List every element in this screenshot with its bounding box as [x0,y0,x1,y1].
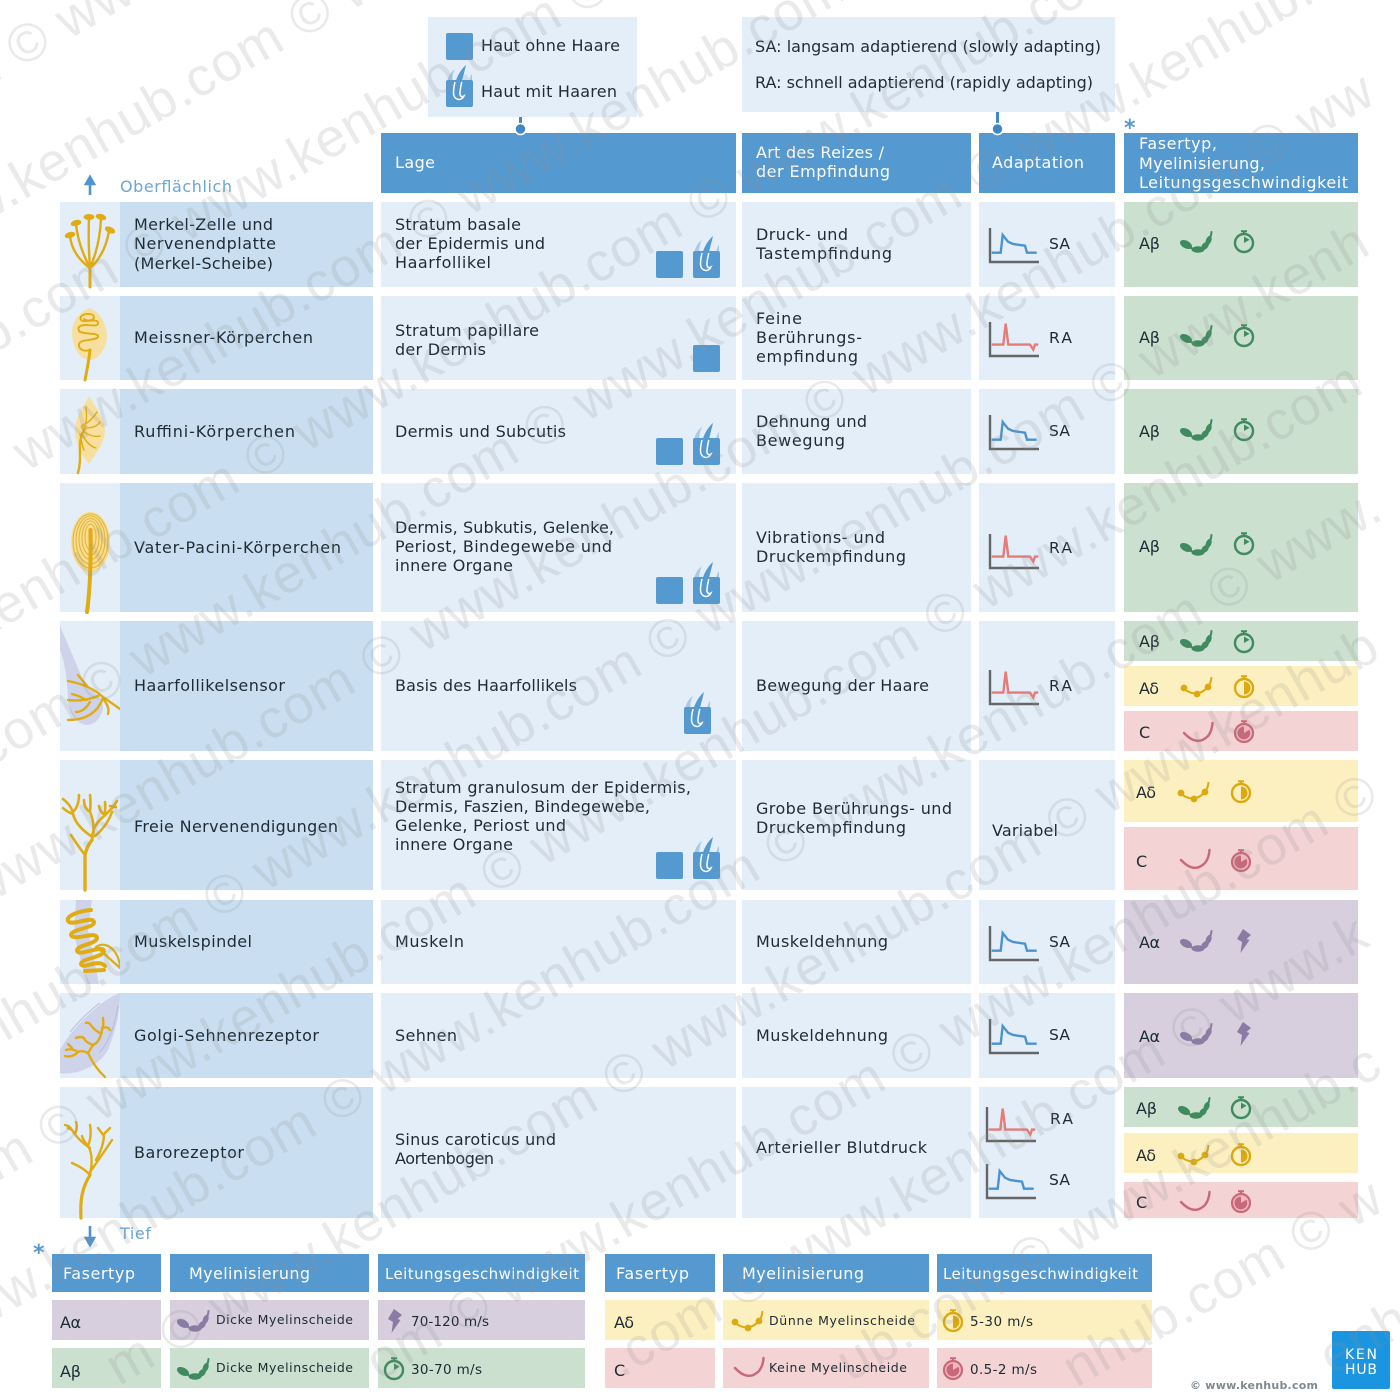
fibre: Abeta: Aβ [1139,632,1160,651]
icon: hair follicle sensor [60,626,120,725]
key row: Abeta: 30-70 m/s [411,1362,482,1378]
adaptation: SA: SA [1049,933,1070,951]
fibre: C: C [1136,852,1147,871]
key row: Adelta: Aδ [614,1313,634,1332]
key header: Fasertyp [605,1254,715,1292]
stimulus: Merkel: Druck- und [756,225,848,244]
stimulus: Ruffini: Dehnung und [756,412,867,431]
watermark: .com © www.kenhub.com © www.k [597,903,1379,1388]
fibre: Aalpha: Aα [1139,933,1160,952]
key header: Myelinisierung [170,1254,369,1292]
adaptation: SA: SA [1049,422,1070,440]
header: Fasertyp: Leitungsgeschwindigkeit [1139,173,1348,192]
adaptation: SA [987,1164,1070,1198]
icons: skin free nerve endings [656,837,720,879]
icon: Pacinian corpuscle [71,512,110,612]
adaptation: RA [990,534,1072,568]
key table: Aalpha and Abeta [52,1254,585,1388]
row: Golgi [60,993,1358,1078]
icon: Meissner corpuscle [72,308,107,380]
fibre: Aalpha [1139,1022,1251,1046]
row: Merkel [60,202,1358,287]
name: Muscle spindle: Muskelspindel [134,932,252,951]
location: Free nerve endings [395,778,691,854]
stimulus: Free nerve endings: Druckempfindung [756,818,906,837]
icons: skin Pacini [656,562,720,604]
location: Free nerve endings: innere Organe [395,835,513,854]
stimulus: Pacini: Vibrations- und [756,528,885,547]
name: Hair follicle: Haarfollikelsensor [134,676,285,695]
stimulus: Free nerve endings [756,799,952,837]
key header: Leitungsgeschwindigkeit [378,1254,585,1292]
key header: Fasertyp [52,1254,161,1292]
location: Free nerve endings: Dermis, Faszien, Bindegewebe, [395,797,650,816]
header: Lage [381,133,736,193]
header: Adaptation: Adaptation [992,153,1084,172]
fibre: Abeta [1139,419,1253,441]
stimulus: Merkel: Tastempfindung [755,244,892,263]
watermark: nhub.com © w [1052,1167,1393,1398]
row: Free nerve endings [60,760,1358,890]
key row: C [605,1348,1152,1388]
icon: Merkel receptor [64,213,116,287]
adaptation: SA [990,415,1070,449]
location: Merkel: Haarfollikel [395,253,491,272]
icon: free nerve endings [63,795,117,890]
icon: hairless skin [446,33,473,60]
stimulus: Muscle spindle: Muskeldehnung [756,932,888,951]
name: Merkel: Nervenendplatte [134,234,276,253]
key row: Aalpha [52,1300,585,1340]
location: Baroreceptor: Sinus caroticus und [395,1130,556,1149]
location: Merkel: der Epidermis und [395,234,545,253]
adaptation: RA: RA [1049,539,1072,557]
key row: Aalpha: Aα [60,1313,81,1332]
adaptation: RA [987,1107,1073,1141]
key table: Adelta and C [605,1254,1152,1388]
icon: Golgi tendon organ [60,993,120,1077]
row: Hair follicle [60,621,1358,751]
fibre: Abeta: Aβ [1136,1099,1157,1118]
text: RA definition: RA: schnell adaptierend (rapidly adapting) [755,73,1093,92]
row: Muscle spindle [60,900,1358,984]
fibre: C [1124,711,1358,751]
fibre: Adelta: Aδ [1136,1146,1156,1165]
logo: Kenhub: HUB [1345,1362,1377,1378]
adaptation: RA: RA [1049,677,1072,695]
adaptation: SA: SA [1049,235,1070,253]
location: Free nerve endings: Gelenke, Periost und [395,816,566,835]
key header: Myelinisierung: Myelinisierung [189,1264,310,1283]
copyright: © www.kenhub.com [1190,1379,1318,1392]
key row: Abeta [52,1348,585,1388]
header: Art des Reizes: der Empfindung [756,162,890,181]
key header: Myelinisierung [723,1254,929,1292]
fibre: Abeta [1124,1087,1358,1127]
stimulus: Meissner: empfindung [756,347,858,366]
stimulus: Meissner [756,309,862,366]
name: Baroreceptor: Barorezeptor [134,1143,244,1162]
label: hairy skin: Haut mit Haaren [481,82,617,101]
legend: skin types [428,17,637,117]
row: Ruffini [60,389,1358,474]
location: Hair follicle: Basis des Haarfollikels [395,676,577,695]
fibre: Abeta [1139,325,1253,347]
fibre: Aalpha: Aα [1139,1027,1160,1046]
header: Fasertyp: Myelinisierung, [1139,154,1265,173]
adaptation: variable: Variabel [992,821,1058,840]
fibre: Abeta [1139,533,1253,556]
location: Golgi: Sehnen [395,1026,457,1045]
key header: Leitungsgeschwindigkeit: Leitungsgeschwindigkeit [943,1265,1138,1283]
key header: Fasertyp: Fasertyp [63,1264,135,1283]
fibre: Aalpha [1139,929,1251,953]
fibre: Abeta: Aβ [1139,537,1160,556]
key row: Abeta: Aβ [60,1362,81,1381]
header: Art des Reizes [742,133,971,193]
watermark: m © www.kenhub.com © www.kenhub.com © www.kenhub [95,615,1389,1397]
location: Meissner: der Dermis [395,340,486,359]
fibre: C: C [1139,723,1150,742]
key row: C: C [614,1361,625,1380]
location: Pacini: innere Organe [395,556,513,575]
fibre: Abeta [1139,231,1253,253]
stimulus: Pacini [756,528,906,566]
stimulus: Golgi: Muskeldehnung [756,1026,888,1045]
adaptation: RA: RA [1050,1110,1073,1128]
key header: Leitungsgeschwindigkeit [937,1254,1152,1292]
icon: hairy skin [446,65,473,107]
fibre: Abeta [1124,621,1358,661]
row: Baroreceptor [60,1087,1358,1218]
key row: Adelta [605,1300,1152,1340]
key row: Adelta: 5-30 m/s [970,1314,1033,1330]
key row: C: Keine Myelinscheide [769,1360,907,1375]
fibre: C [1124,1182,1358,1218]
icon: hairless skin [693,345,720,372]
fibre: Adelta: Aδ [1136,783,1156,802]
fibre: Adelta: Aδ [1139,679,1159,698]
key row: Abeta: Dicke Myelinscheide [216,1360,353,1375]
stimulus: Baroreceptor: Arterieller Blutdruck [756,1138,928,1157]
stimulus: Meissner: Feine [756,309,802,328]
location: Free nerve endings: Stratum granulosum der Epidermis, [395,778,691,797]
key header: Fasertyp: Fasertyp [616,1264,689,1283]
fibre: C: C [1136,1193,1147,1212]
location: Merkel: Stratum basale [395,215,521,234]
location: Pacini: Dermis, Subkutis, Gelenke, [395,518,614,537]
watermark: om © www.kenhub.com © www.kenhub.com © [355,761,1388,1392]
key header: Leitungsgeschwindigkeit: Leitungsgeschwindigkeit [385,1265,579,1283]
key row: C: 0.5-2 m/s [970,1362,1037,1378]
label: deep: Tief [119,1224,151,1243]
name: Merkel [134,215,276,273]
header: Fasertyp [1124,133,1358,193]
name: Merkel: Merkel-Zelle und [134,215,273,234]
name: Ruffini: Ruffini-Körperchen [134,422,295,441]
stimulus: Pacini: Druckempfindung [756,547,906,566]
fibre: Abeta: Aβ [1139,234,1160,253]
stimulus: Ruffini: Bewegung [756,431,845,450]
icon: baroreceptor [65,1122,112,1218]
fibre: Adelta [1124,666,1358,706]
adaptation: SA [990,228,1070,262]
icons: skin Ruffini [656,423,720,465]
location: Pacini [395,518,614,575]
stimulus: Merkel [755,225,892,263]
adaptation: SA [990,926,1070,960]
row: Pacini [60,483,1358,612]
header: Lage: Lage [395,153,435,172]
stimulus: Hair follicle: Bewegung der Haare [756,676,929,695]
key row: Adelta: Dünne Myelinscheide [769,1313,915,1328]
arrow: deep [86,1226,94,1245]
header: Adaptation [979,133,1115,193]
adaptation: SA: SA [1049,1026,1070,1044]
name: Meissner: Meissner-Körperchen [134,328,313,347]
stimulus: Ruffini [756,412,867,450]
adaptation: RA [990,322,1072,356]
fibre: C [1124,827,1358,890]
location: Pacini: Periost, Bindegewebe und [395,537,612,556]
fibre: Adelta [1124,1133,1358,1173]
stimulus: Meissner: Berührungs- [756,328,862,347]
icon: hairy skin [684,692,711,734]
logo: Kenhub [1332,1331,1390,1389]
key row: Aalpha: 70-120 m/s [411,1314,489,1330]
label: superficial: Oberflächlich [120,177,232,196]
location: Muscle spindle: Muskeln [395,932,464,951]
name: Pacini: Vater-Pacini-Körperchen [134,538,341,557]
watermark: ub.com © www.kenhub.c [826,1032,1391,1393]
fibre: Abeta: Aβ [1139,422,1160,441]
icon: Ruffini corpuscle [75,396,105,473]
header: Art des Reizes: Art des Reizes / [756,143,885,162]
name: Free nerve endings: Freie Nervenendigungen [134,817,338,836]
stimulus: Free nerve endings: Grobe Berührungs- und [756,799,952,818]
location: Ruffini: Dermis und Subcutis [395,422,566,441]
location: Meissner: Stratum papillare [395,321,539,340]
key row: Aalpha: Dicke Myelinscheide [216,1312,353,1327]
name: Golgi: Golgi-Sehnenrezeptor [134,1026,319,1045]
location: Baroreceptor: Aortenbogen [395,1149,494,1168]
adaptation: RA [990,670,1072,704]
asterisk: fibre key: * [33,1241,45,1266]
logo: Kenhub: KEN [1345,1347,1377,1363]
arrow: superficial [86,177,94,195]
location: Meissner [395,321,539,359]
legend: adaptation abbreviations [742,17,1115,112]
adaptation: SA [990,1019,1070,1053]
asterisk: fibre column: * [1124,116,1136,141]
icons: skin Merkel [656,236,720,278]
adaptation: SA: SA [1049,1171,1070,1189]
label: hairless skin: Haut ohne Haare [481,36,620,55]
key header: Myelinisierung: Myelinisierung [742,1264,864,1283]
fibre: Adelta [1124,760,1358,822]
connector pin: skin legend [515,117,526,134]
fibre: Abeta: Aβ [1139,328,1160,347]
adaptation: RA: RA [1049,329,1072,347]
text: SA definition: SA: langsam adaptierend (slowly adapting) [755,37,1101,56]
connector pin: adaptation legend [992,112,1003,134]
name: Merkel: (Merkel-Scheibe) [134,254,273,273]
header: Fasertyp: Fasertyp, [1139,134,1217,153]
location: Merkel [395,215,545,272]
location: Baroreceptor [395,1130,556,1168]
icon: muscle spindle [68,900,120,984]
row: Meissner [60,296,1358,380]
